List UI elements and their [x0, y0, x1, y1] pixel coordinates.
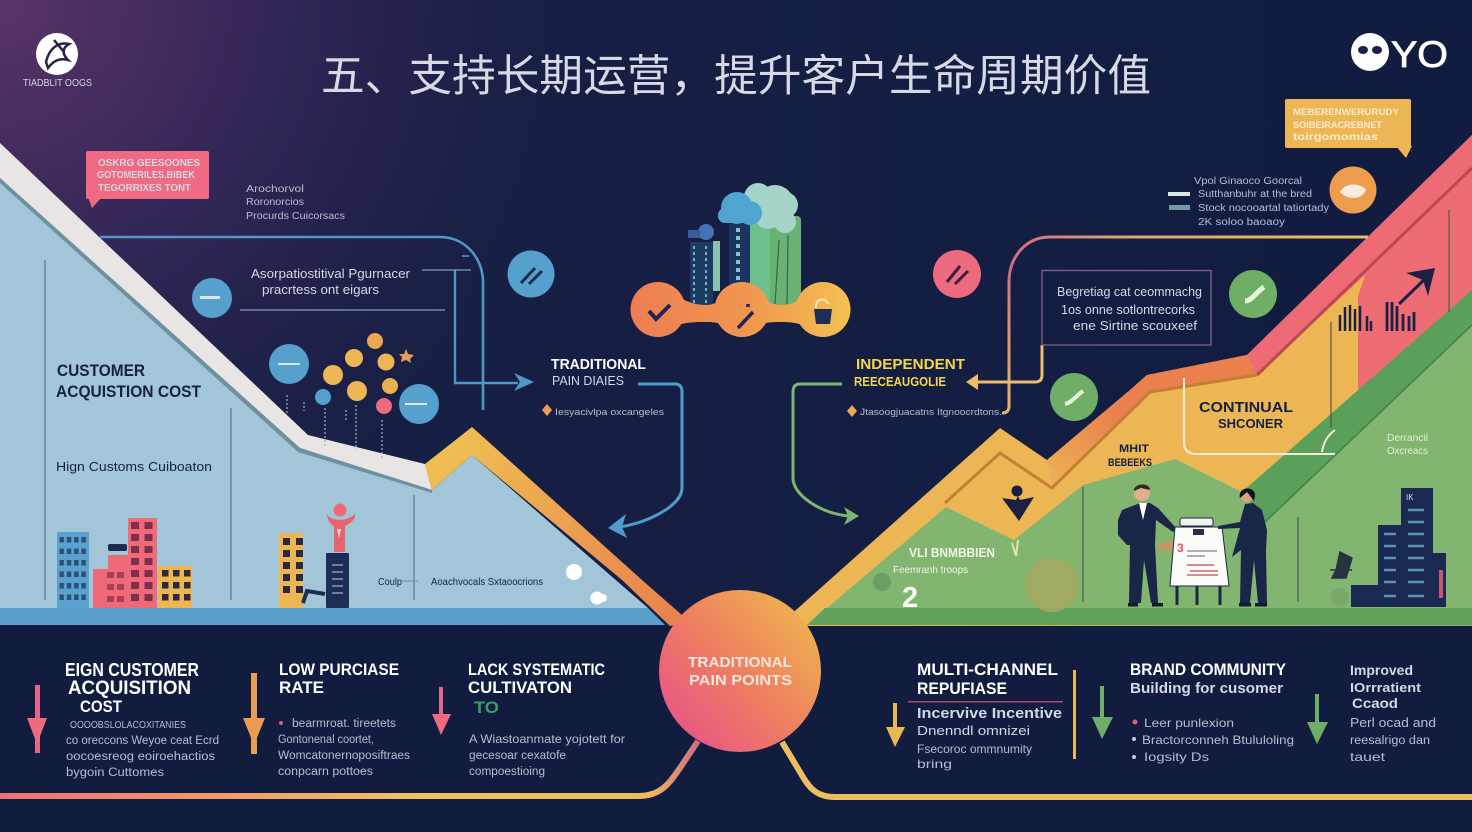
icon: right skyscrapers	[1330, 488, 1446, 607]
text block: upper left note: Procurds Cuicorsacs	[246, 210, 345, 222]
heading: traditional pain points: Iesyacivlpa oxcangeles	[555, 407, 664, 418]
person right	[1218, 488, 1267, 606]
text block: upper right note: Vpol Ginaoco Goorcal	[1194, 175, 1302, 187]
text block: upper left note: Roronorcios	[246, 196, 304, 208]
connector: blue path to traditional pain points	[100, 237, 534, 410]
benefit: multi-channel repurchase: Dnenndl omnizei	[917, 724, 1030, 738]
text: multi repeat label: BEBEEKS	[1108, 457, 1152, 469]
text block: left description	[251, 267, 410, 297]
text block: lower right slope: Feemranh troops	[893, 564, 968, 576]
heading: traditional pain points: PAIN DIAIES	[552, 373, 624, 388]
text block: boxed description: Begretiag cat ceommachg	[1057, 285, 1202, 299]
heading: customer acquisition cost	[56, 362, 202, 401]
person left	[1118, 484, 1176, 606]
heading: customer acquisition cost: ACQUISTION COST	[56, 382, 202, 401]
text block: boxed description	[1042, 270, 1211, 345]
heading: continual: CONTINUAL	[1199, 400, 1293, 416]
icon: green leaf badge	[1229, 270, 1277, 318]
icon: orange bowl badge	[1330, 166, 1376, 214]
pain point: low purchase rate: Womcatonernoposiftraes	[278, 750, 410, 762]
benefit: multi-channel repurchase: MULTI-CHANNEL	[917, 660, 1058, 679]
pain point: high customer acquisition cost: EIGN CUSTOMER	[65, 660, 199, 680]
text block: lower right slope: VLI BNMBBIEN	[909, 545, 995, 560]
benefit: improved retention	[1307, 662, 1436, 764]
pain point: low purchase rate: Gontonenal coortet,	[278, 734, 374, 746]
benefit: improved retention: IOrrratient	[1350, 680, 1422, 695]
icon: left buildings	[57, 518, 303, 608]
text: high customer cultivation: Hign Customs Cuiboaton	[56, 459, 212, 474]
benefit: multi-channel repurchase: bring	[917, 757, 952, 771]
arrow: green curved to center	[793, 384, 859, 525]
pain point: high customer acquisition cost: ACQUISITION	[68, 678, 191, 699]
benefit: multi-channel repurchase: Fsecoroc ommnumity	[917, 742, 1032, 756]
text block: lower right slope: 2	[902, 582, 918, 614]
pain point: high customer acquisition cost: co oreccons Weyoe ceat Ecrd	[66, 735, 219, 747]
callout: yellow: toirgomomias	[1293, 132, 1379, 143]
callout: yellow: SOIBEIRACREBNET	[1293, 120, 1382, 131]
text: far right label	[1387, 433, 1428, 457]
icon: blue badges and coins	[192, 278, 439, 460]
benefit: improved retention: Perl ocad and	[1350, 715, 1436, 730]
benefit: brand community building	[1092, 661, 1294, 764]
benefit: improved retention: tauet	[1350, 750, 1386, 764]
text block: upper right note: Stock nocooartal tatiortady	[1198, 203, 1329, 214]
callout: yellow: MEBERENWERURUDY	[1293, 107, 1400, 118]
flip chart board: 3	[1177, 541, 1184, 555]
text block: upper left note	[246, 183, 345, 222]
icon: two business people with chart board	[1118, 484, 1267, 606]
heading: independent: REECEAUGOLIE	[854, 375, 946, 389]
text block: upper right note: Sutthanbuhr at the bred	[1198, 189, 1312, 200]
pain point: lack systematic cultivation	[432, 660, 625, 778]
pain point: lack systematic cultivation: CULTIVATON	[468, 678, 572, 697]
pain point: high customer acquisition cost: COST	[80, 697, 123, 716]
pain point: low purchase rate: conpcarn pottoes	[278, 766, 373, 778]
text: left slope label: Aoachvocals Sxtaoocrions	[431, 576, 543, 588]
callout: pink: TEGORRIXES TONT	[98, 183, 191, 194]
connector: gradient path to independent	[966, 237, 1368, 413]
callout: yellow	[1285, 99, 1412, 158]
text: far right label: Derrancil	[1387, 433, 1428, 444]
text: left slope label: Coulp	[378, 577, 402, 588]
callout: pink	[86, 151, 209, 208]
panel: right ascending slope	[778, 135, 1472, 626]
pain point: low purchase rate	[243, 660, 410, 778]
heading: independent	[847, 356, 1002, 418]
text block: lower right slope	[873, 540, 1349, 614]
text block: boxed description: ene Sirtine scouxeef	[1073, 319, 1198, 333]
decorative bottom connector lines	[0, 741, 1472, 797]
icon: pink pen badge	[933, 250, 981, 298]
benefit: brand community building: Bractorconneh Btululoling	[1142, 733, 1294, 747]
text: far right label: Oxcreacs	[1387, 446, 1428, 457]
icon: dark figure on yellow	[1002, 486, 1034, 521]
icon: central city on connected circles	[630, 183, 850, 337]
pain point: lack systematic cultivation: TO	[474, 698, 499, 717]
text: left slope label	[378, 576, 543, 588]
pain point: lack systematic cultivation: compoestioing	[469, 766, 545, 778]
text: multi repeat label: MHIT	[1119, 443, 1149, 455]
icon: right skyscrapers: IK	[1406, 493, 1414, 502]
benefit: brand community building: Leer punlexion	[1144, 716, 1234, 730]
logo: left emblem	[23, 33, 92, 89]
pain point: lack systematic cultivation: LACK SYSTEMATIC	[468, 660, 605, 679]
text block: left description: Asorpatiostitival Pgurnacer	[251, 267, 410, 281]
panel: left descending slope	[0, 143, 690, 626]
callout: pink: GOTOMERILES.BIBEK	[97, 170, 196, 181]
benefit: improved retention: reesalrigo dan	[1350, 735, 1430, 747]
pain point: lack systematic cultivation: gecesoar cexatofe	[469, 750, 566, 762]
heading: customer acquisition cost: CUSTOMER	[57, 362, 145, 380]
benefit: improved retention: Improved	[1350, 662, 1413, 678]
text block: boxed description: 1os onne sotlontrecorks	[1061, 303, 1195, 317]
callout: pink: OSKRG GEESOONES	[98, 158, 200, 169]
benefit: multi-channel repurchase	[886, 660, 1076, 771]
text: multi repeat label	[1108, 443, 1152, 469]
logo: right brand	[1351, 33, 1448, 75]
icon: white blobs	[566, 564, 607, 604]
logo: right brand: YO	[1391, 34, 1448, 75]
heading: traditional pain points	[542, 357, 664, 418]
heading: traditional pain points: TRADITIONAL	[551, 357, 646, 373]
icon: green leaf badge lower	[1050, 373, 1098, 421]
flip chart board	[1170, 518, 1229, 605]
text block: upper left note: Arochorvol	[246, 183, 304, 195]
center badge: TRADITIONAL	[688, 654, 792, 671]
icon: growth bars and arrow	[1340, 268, 1435, 331]
logo: left emblem: TIADBLIT OOGS	[23, 78, 92, 89]
pain point: high customer acquisition cost	[27, 660, 219, 779]
pain point: low purchase rate: RATE	[279, 678, 324, 697]
benefit: brand community building: Building for cusomer	[1130, 681, 1283, 697]
benefit: brand community building: Iogsity Ds	[1144, 750, 1209, 764]
pain point: high customer acquisition cost: oocoesreog eoiroehactios	[66, 751, 215, 763]
pain point: low purchase rate: LOW PURCIASE	[279, 660, 399, 679]
benefit: brand community building: BRAND COMMUNITY	[1130, 661, 1286, 679]
benefit: multi-channel repurchase: Incervive Incentive	[917, 705, 1062, 722]
icon: figure on tower	[303, 504, 356, 608]
arrow: blue curved to center	[608, 384, 682, 538]
pain point: low purchase rate: bearmroat. tireetets	[292, 718, 396, 730]
text block: upper right note	[1168, 175, 1329, 228]
center badge	[659, 590, 821, 752]
heading: continual: SHCONER	[1218, 416, 1284, 431]
title: 五、支持长期运营，提升客户生命周期价值	[321, 53, 1151, 101]
center badge: PAIN POINTS	[689, 672, 792, 689]
icon: blue pen badge	[508, 250, 554, 298]
pain point: high customer acquisition cost: bygoin Cuttomes	[66, 767, 164, 779]
pain point: high customer acquisition cost: OOOOBSLOLACOXITANIES	[70, 719, 186, 731]
pain point: lack systematic cultivation: A Wiastoanmate yojotett for	[469, 732, 625, 746]
text block: left description: pracrtess ont eigars	[262, 283, 379, 297]
heading: continual	[1184, 378, 1335, 454]
benefit: improved retention: Ccaod	[1352, 695, 1398, 711]
text block: upper right note: 2K soloo baoaoy	[1198, 217, 1285, 228]
heading: independent: Jtasoogjuacatns Itgnoocrdtons.	[860, 407, 1002, 418]
heading: independent: INDEPENDENT	[856, 356, 965, 373]
benefit: multi-channel repurchase: REPUFIASE	[917, 679, 1007, 698]
